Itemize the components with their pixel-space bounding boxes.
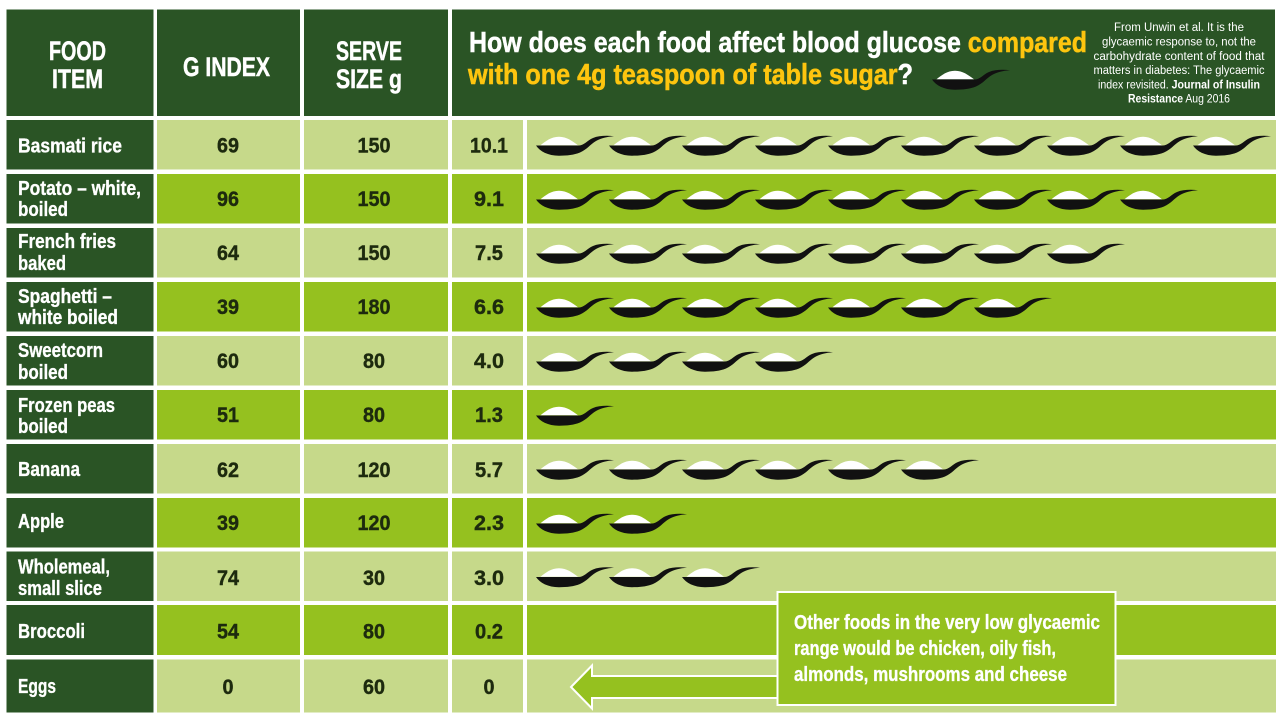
row: Eggs: Eggs [18, 675, 56, 698]
row: Frozen peas: 1.3 [475, 403, 503, 427]
row: Apple [6, 498, 1276, 548]
header: serve size: SERVE [336, 36, 402, 66]
callout: other low glycaemic foods: almonds, mushrooms and cheese [794, 663, 1067, 686]
row: Sweetcorn: 80 [363, 349, 385, 373]
row: Apple: 120 [358, 511, 391, 535]
row: French fries: baked [18, 252, 66, 275]
row: Spaghetti: white boiled [17, 306, 118, 329]
icon: spoon key [932, 70, 1010, 90]
header: serve size: SIZE g [336, 64, 402, 94]
row: Basmati rice: 10.1 [470, 134, 508, 158]
row: Basmati rice: Basmati rice [18, 134, 122, 158]
row: Potato: Potato – white, [18, 177, 141, 200]
row: Wholemeal [6, 552, 1276, 601]
row: Banana: Banana [18, 458, 80, 481]
row: Apple: 39 [217, 511, 239, 535]
row: Frozen peas: Frozen peas [18, 394, 115, 417]
row: Apple: 2.3 [474, 511, 504, 535]
header: glycaemic index: G INDEX [183, 52, 270, 82]
row: Potato: 150 [358, 187, 391, 211]
row: Frozen peas: 51 [217, 403, 239, 427]
row: Basmati rice: 150 [358, 134, 391, 158]
row: Basmati rice: 69 [217, 134, 239, 158]
row: Potato: boiled [18, 198, 68, 221]
row: Spaghetti: Spaghetti – [18, 285, 112, 308]
row: French fries [6, 228, 1276, 278]
row: Banana [6, 444, 1276, 494]
citation: Resistance Aug 2016 [1128, 94, 1230, 106]
row: Eggs: 0 [484, 675, 495, 699]
row: Potato: 96 [217, 187, 239, 211]
row: Banana: 5.7 [475, 458, 503, 482]
callout: other low glycaemic foods: range would be chicken, oily fish, [794, 637, 1056, 660]
row: Spaghetti: 6.6 [474, 295, 504, 319]
header: food item [6, 10, 154, 116]
row: Apple: Apple [18, 510, 64, 533]
row: Sweetcorn: boiled [18, 361, 68, 384]
row: Spaghetti: 180 [358, 295, 391, 319]
citation: matters in diabetes: The glycaemic [1094, 65, 1265, 77]
row: Broccoli: Broccoli [18, 620, 85, 643]
row: Eggs [6, 660, 1276, 712]
row: Spaghetti [6, 282, 1276, 332]
row: Eggs: 0 [222, 675, 234, 699]
header: food item: FOOD [49, 36, 106, 66]
row: Wholemeal: 74 [217, 566, 239, 590]
row: Sweetcorn: Sweetcorn [18, 339, 103, 362]
citation: glycaemic response to, not the [1102, 36, 1256, 48]
row: Wholemeal: Wholemeal, [18, 556, 110, 578]
row: Sweetcorn [6, 336, 1276, 386]
row: Broccoli [6, 605, 1276, 655]
row: Eggs: 60 [363, 675, 385, 699]
citation [1094, 22, 1265, 106]
row: French fries: 150 [358, 241, 391, 265]
row: Sweetcorn: 4.0 [474, 349, 504, 373]
row: Wholemeal: small slice [18, 577, 102, 600]
callout: other low glycaemic foods [778, 592, 1116, 705]
header: food item: ITEM [52, 64, 103, 94]
row: Broccoli: 54 [217, 620, 239, 644]
title: with one 4g teaspoon of table sugar? [467, 59, 913, 91]
title [467, 27, 1087, 91]
row: Frozen peas: boiled [18, 415, 68, 438]
row: French fries: 7.5 [475, 241, 503, 265]
header: glycaemic index [157, 10, 300, 116]
row: Wholemeal: 30 [363, 566, 385, 590]
row: Broccoli: 80 [363, 620, 385, 644]
citation: index revisited. Journal of Insulin [1098, 80, 1260, 92]
row: French fries: French fries [18, 230, 116, 253]
row: French fries: 64 [217, 241, 239, 265]
title: How does each food affect blood glucose compared [469, 27, 1087, 59]
row: Sweetcorn: 60 [217, 349, 239, 373]
row: Frozen peas [6, 390, 1276, 440]
citation: carbohydrate content of food that [1094, 51, 1265, 63]
callout: other low glycaemic foods: Other foods in the very low glycaemic [794, 611, 1100, 634]
row: Broccoli: 0.2 [475, 620, 503, 644]
row: Basmati rice [6, 120, 1276, 170]
row: Potato: 9.1 [474, 187, 504, 211]
row: Spaghetti: 39 [217, 295, 239, 319]
header: title panel [452, 10, 1275, 116]
row: Potato [6, 174, 1276, 224]
row: Frozen peas: 80 [363, 403, 385, 427]
arrow: points to eggs row [571, 666, 778, 708]
citation: From Unwin et al. It is the [1114, 22, 1244, 34]
row: Banana: 120 [358, 458, 391, 482]
row: Wholemeal: 3.0 [474, 566, 504, 590]
header: serve size [304, 10, 448, 116]
row: Banana: 62 [217, 458, 239, 482]
